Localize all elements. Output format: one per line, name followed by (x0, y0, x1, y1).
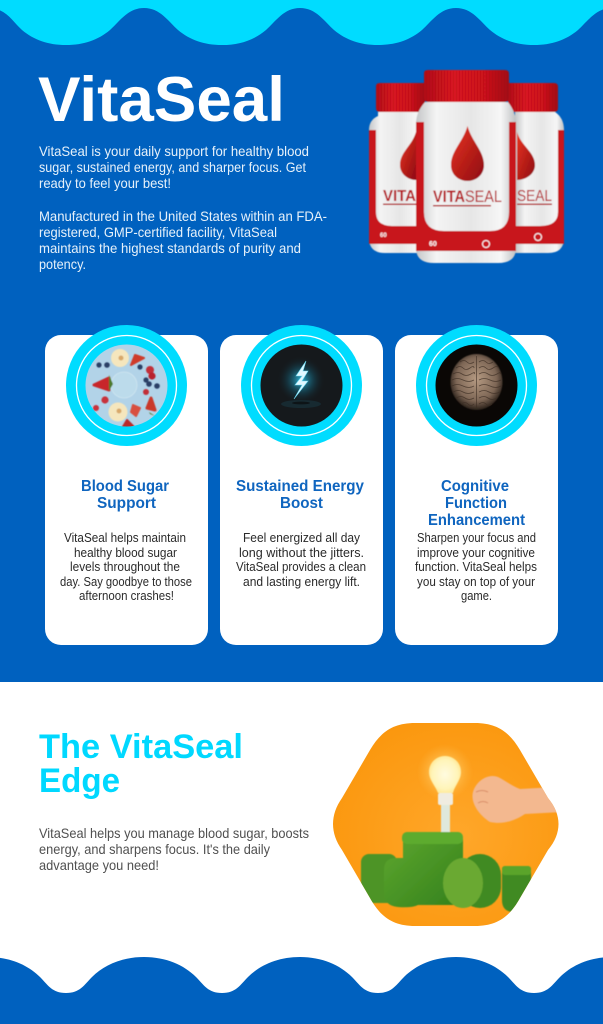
description: VitaSeal provides a clean (236, 560, 366, 574)
intro paragraph: VitaSeal is your daily support for healthy blood (39, 144, 309, 159)
description: Sharpen your focus and (417, 531, 536, 545)
heading (81, 478, 169, 512)
description (236, 531, 366, 589)
edge description: advantage you need! (39, 858, 159, 873)
icon: lightning bolt (241, 325, 362, 446)
manufacturing paragraph: registered, GMP-certified facility, VitaSeal (39, 225, 277, 240)
center bottle: VITASEAL (433, 188, 502, 206)
heading: Cognitive (441, 478, 509, 495)
edge description: VitaSeal helps you manage blood sugar, boosts (39, 826, 309, 841)
panel: sustained energy boost (220, 325, 383, 645)
white lower section (0, 682, 603, 1024)
heading: Sustained Energy (236, 478, 364, 495)
title: VitaSeal (38, 65, 285, 135)
description (415, 531, 537, 603)
heading (428, 478, 525, 529)
left bottle: 60 (380, 233, 387, 239)
description: long without the jitters. (239, 546, 364, 560)
top cyan wave (0, 0, 603, 45)
heading: the vitaseal edge (39, 728, 243, 800)
right bottle: SEAL (517, 188, 552, 205)
center bottle: 60 (429, 241, 437, 248)
left bottle: VITA (383, 188, 416, 205)
manufacturing paragraph: potency. (39, 257, 86, 272)
heading: Support (97, 495, 156, 512)
heading: Blood Sugar (81, 478, 169, 495)
center bottle (416, 70, 516, 263)
intro paragraph: sugar, sustained energy, and sharper focus. Get (39, 160, 306, 175)
panel: cognitive function enhancement (395, 325, 558, 645)
icon: brain (416, 325, 537, 446)
description: game. (461, 589, 492, 603)
edge description (39, 826, 309, 873)
heading: the vitaseal edge: Edge (39, 762, 120, 800)
edge description: energy, and sharpens focus. It's the daily (39, 842, 270, 857)
heading (236, 478, 364, 512)
description: healthy blood sugar (74, 546, 177, 560)
description: improve your cognitive (417, 546, 535, 560)
blue page background (0, 0, 603, 682)
left bottle (369, 83, 425, 253)
description: you stay on top of your (417, 575, 535, 589)
description (60, 531, 192, 603)
heading: Boost (280, 495, 323, 512)
hexagon image: light bulb, green shapes and fist (330, 720, 562, 930)
heading: Enhancement (428, 512, 525, 529)
heading: Function (445, 495, 507, 512)
description: function. VitaSeal helps (415, 560, 537, 574)
description: day. Say goodbye to those (60, 575, 192, 589)
description: levels throughout the (70, 560, 180, 574)
intro paragraph: ready to feel your best! (39, 176, 171, 191)
icon: fruit plate (66, 325, 187, 446)
description: afternoon crashes! (79, 589, 174, 603)
panel: blood sugar support (45, 325, 208, 645)
heading: the vitaseal edge: The VitaSeal (39, 728, 243, 766)
bottom blue wave (0, 957, 603, 1024)
right bottle (508, 83, 564, 253)
manufacturing paragraph (39, 209, 327, 272)
manufacturing paragraph: Manufactured in the United States within an FDA- (39, 209, 327, 224)
description: and lasting energy lift. (243, 575, 360, 589)
product image: three VitaSeal bottles (369, 70, 564, 263)
intro paragraph (39, 144, 309, 191)
description: Feel energized all day (243, 531, 361, 545)
manufacturing paragraph: maintains the highest standards of purity and (39, 241, 301, 256)
description: VitaSeal helps maintain (64, 531, 186, 545)
